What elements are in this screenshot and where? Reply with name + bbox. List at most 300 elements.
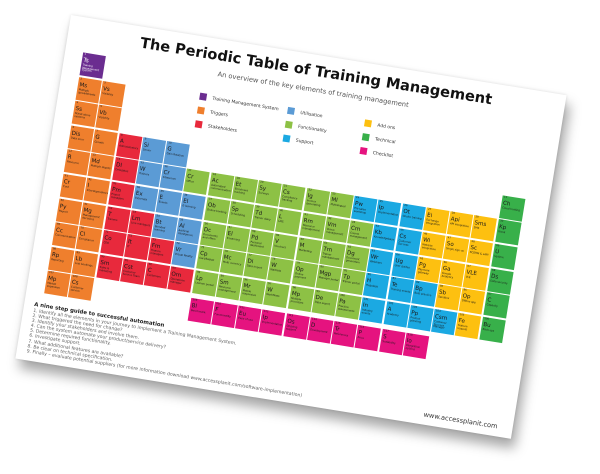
periodic table: 78 [272,257,275,261]
text block: nine step guide: 9. Finally – evaluate potential suppliers (for more information download www.accessplanit.com/software-implementation) [26,349,302,399]
periodic table: 42 [328,217,332,220]
periodic table: E-learning [182,204,196,209]
periodic table: Mp [291,290,301,298]
periodic table: 10 [168,141,172,145]
periodic table: E [159,194,164,201]
periodic table: Dis [71,130,81,137]
periodic table: Bu [483,321,491,329]
periodic table: Trainer portal [342,280,360,286]
periodic table: 79 [297,261,300,265]
text block: nine step guide: A nine step guide to successful automation [34,302,165,329]
periodic table: W [267,286,273,293]
periodic table: 41 [304,213,308,216]
legend: Support [295,139,314,146]
periodic table: 44 [375,224,379,228]
periodic table: El [183,198,189,205]
text block: nine step guide: 3. Identify your stakeholders and involve them. [31,319,139,341]
periodic table: Gain Rotation [166,152,184,158]
periodic table: V [275,238,279,245]
periodic table: Pw [355,200,363,208]
periodic table: Customer Success [398,239,411,247]
periodic table: 88 [53,247,56,251]
periodic table: 2 [80,77,82,81]
periodic table: Events [158,201,168,205]
periodic table: Data error [71,137,84,142]
periodic table: 24 [356,196,359,199]
periodic table: A [387,306,392,312]
periodic table: Multilingual [330,203,346,208]
periodic table: 93 [172,266,176,270]
periodic table: Wr [370,254,379,261]
periodic table: 102 [388,301,394,305]
periodic table: Kp [499,224,507,231]
periodic table: 3 [104,81,106,84]
periodic table: Kb [374,229,382,236]
periodic table: 34 [137,186,140,189]
periodic table: 53 [133,210,136,214]
periodic table: W [271,262,277,269]
periodic table: Product planning [410,316,421,324]
periodic table: Marketing [299,249,312,254]
periodic table: Md [91,158,100,165]
periodic table: User guides [394,264,410,269]
periodic table: 69 [57,222,60,226]
periodic table: Visibility [98,116,109,121]
periodic table: 67 [467,265,471,268]
periodic table: Resource [67,160,79,165]
periodic table: C [147,267,152,274]
periodic table: 95 [220,274,224,278]
periodic table: 30 [500,219,504,223]
periodic table: Website integration [422,243,436,251]
periodic table: 87 [488,292,492,296]
periodic table: Resource management [218,285,236,294]
periodic table: Ongoing support [286,325,298,332]
periodic table: 103 [412,305,417,309]
text block: nine step guide [26,302,302,399]
legend: Add ons [377,123,395,131]
periodic table: Ch [503,200,511,207]
periodic table: Pre-sales workshop [354,207,366,214]
legend [194,92,396,159]
periodic table: Multiple processes [290,297,304,305]
periodic table: Lost bookings [75,262,93,268]
periodic table: Cs [283,189,290,196]
periodic table: Tp [343,273,351,280]
periodic table: 31 [65,174,68,178]
periodic table: Pp [411,310,419,317]
periodic table: 43 [352,221,355,224]
periodic table: F [215,306,219,313]
periodic table: Tm [323,246,333,253]
periodic table: Cs [71,279,79,286]
periodic table: Project managers [111,193,124,200]
periodic table: Cp [200,250,208,257]
periodic table: 60 [300,238,304,241]
periodic table: Webinars [370,260,382,265]
periodic table: Lp [196,275,203,282]
periodic table: Di [247,258,254,265]
periodic table: Csm [434,314,448,321]
periodic table: Sy [259,185,267,192]
periodic table: Blended learning [154,225,165,232]
periodic table: Multi currency [223,261,241,266]
periodic table: Cost [63,185,69,189]
legend: Technical [375,137,396,145]
periodic table: Cr [63,179,70,185]
periodic table: Dc [203,227,212,234]
periodic table: Mobile responsive [242,289,256,297]
periodic table: Classroom [162,176,176,181]
periodic table: Online booking [207,208,227,214]
footer url: www.accessplanit.com [423,411,498,430]
periodic table: Management decisions [82,214,100,221]
periodic table: Compliance [79,237,94,243]
periodic table: G [95,134,100,141]
periodic table: 63 [371,249,375,253]
periodic table: Sm [100,259,110,267]
periodic table: Externals [135,197,147,202]
periodic table: 76 [224,250,228,253]
periodic table: T [108,211,112,218]
periodic table: Industry events [361,308,373,315]
periodic table: Customer service [70,286,84,293]
periodic table: 112 [263,310,269,313]
periodic table: Integration options [405,344,420,351]
periodic table: 109 [192,298,198,302]
periodic table: Surveys [258,191,269,196]
periodic table: Cc [55,227,63,234]
legend: Functionality [298,125,327,134]
periodic table: Price [357,336,364,340]
periodic table: Rp [51,252,60,259]
periodic table: 37 [209,197,212,201]
periodic table: In [362,302,369,309]
periodic table: Trainers [107,218,118,222]
periodic table: Cs [399,233,407,240]
periodic table: 113 [288,314,293,317]
periodic table: Trainer diary [254,216,271,222]
periodic table: Payroll [59,210,68,214]
periodic table: Academy [387,312,399,317]
periodic table: Back ups [482,328,494,333]
periodic table: Benchmark [191,309,206,314]
title: The Periodic Table of Training Management [139,35,493,108]
periodic table: Ob [207,202,216,209]
periodic table: 28 [452,211,455,215]
periodic table: 116 [359,325,364,329]
periodic table: 99 [316,290,320,293]
periodic table: Exchange integration [426,219,440,226]
periodic table: Io [406,337,412,344]
periodic table: Vouchers [274,245,286,249]
periodic table: El [227,230,233,237]
periodic table: Om [171,271,182,278]
periodic table: Venue management [326,228,344,236]
periodic table: 21 [284,184,287,188]
periodic table: Course management [350,232,367,240]
periodic table: Best practice [414,292,432,297]
periodic table: 100 [340,294,345,297]
periodic table: Pd [251,234,259,241]
periodic table: Bp [415,285,423,292]
periodic table: Visibility [102,92,113,97]
periodic table: Data export [314,301,330,306]
periodic table: Uptime [494,255,504,259]
periodic table: 70 [80,226,84,230]
periodic table: G [167,146,172,152]
periodic table: 81 [344,269,348,272]
periodic table: D [311,322,316,329]
periodic table: Vb [99,109,107,116]
periodic table: 33 [113,182,117,185]
periodic table: Market expansion [47,282,60,289]
periodic table: Mc [223,254,232,261]
periodic table: Fe [458,317,465,324]
periodic table: 51 [84,203,88,206]
periodic table: Dg [347,250,355,257]
periodic table: Ms [79,82,88,89]
periodic table: Development [310,328,328,334]
legend: Triggers [210,111,228,118]
periodic table: 22 [308,188,312,192]
periodic table: Ease of use [238,317,253,322]
periodic table: 80 [320,265,324,269]
periodic table: Data import [246,264,262,270]
periodic table: 90 [101,255,105,258]
periodic table: 32 [88,178,92,181]
periodic table: Automated communication [210,184,231,192]
periodic table: Mp [48,275,57,283]
periodic table: Training Management System [82,64,99,73]
periodic table: De [315,294,324,301]
periodic table: P [358,330,362,336]
periodic table: Si [143,142,149,149]
periodic table: Bt [155,219,162,226]
periodic table: Wi [423,237,430,244]
periodic table: Kiosk [498,230,505,234]
periodic table: 97 [268,282,271,285]
periodic table: Dl [116,162,122,169]
periodic table: Resource management [302,224,320,232]
periodic table: Ss [75,105,82,112]
periodic table: Document generation [346,256,360,264]
periodic table: 62 [348,245,351,249]
periodic table: References [334,332,348,338]
periodic table: 47 [448,236,451,240]
periodic table: Offline app [462,299,476,305]
periodic table: 77 [248,253,252,257]
periodic table: Ac [211,177,219,184]
periodic table: 98 [293,286,296,289]
periodic table: 59 [276,234,279,237]
periodic table: 20 [260,180,264,184]
periodic table: 117 [384,329,389,333]
periodic table: 49 [496,244,500,247]
periodic table: 83 [392,277,396,280]
periodic table: 14 [117,157,121,161]
periodic table: 92 [148,263,152,266]
periodic table: Reporting [51,258,64,263]
periodic table: Learner portal [195,281,214,287]
periodic table: Payment gateway [418,268,430,275]
periodic table: Onsite training [402,215,422,221]
periodic table: Delegates [115,168,129,173]
periodic table: Personal dashboard [250,241,264,248]
periodic table: 4 [76,101,78,104]
periodic table: Cst [124,263,133,271]
periodic table: 52 [109,207,113,210]
periodic table: 12 [69,149,72,153]
periodic table: 6 [72,126,74,129]
periodic table: Online payment [294,272,306,280]
periodic table: 46 [424,232,427,236]
periodic table: Ip [378,204,384,211]
periodic table: 27 [428,208,431,211]
periodic table: 104 [436,309,441,313]
periodic table: Feature request [457,324,468,331]
periodic table: H [366,277,372,284]
periodic table: Trainers [139,172,149,177]
periodic table: IT [127,245,130,248]
periodic table: Ei [427,212,433,219]
periodic table: 8 [121,134,123,137]
periodic table: VLE [465,276,471,279]
periodic table: Ml [331,197,338,203]
text block: nine step guide: 7. What additional features are available? [28,339,124,359]
periodic table: Enrolment tracking [234,188,248,195]
periodic table: 39 [256,205,260,209]
periodic table: 26 [404,204,408,207]
periodic table: Single sign-on [446,247,464,253]
text block: nine step guide: 2. What triggered the need for change? [32,314,123,333]
periodic table: Eu [239,310,246,317]
periodic table [44,52,526,360]
periodic table: Implementation [262,321,282,327]
periodic table: Compliance tracking [282,195,297,202]
periodic table: Op [295,266,304,273]
periodic table: Tr [334,326,340,332]
periodic table: 73 [152,238,156,241]
periodic table: Co [104,235,112,242]
periodic table: 105 [459,313,465,317]
periodic table: Bl [191,303,197,309]
periodic table: 74 [176,242,180,245]
periodic table: Cloud hosting [502,207,520,212]
periodic table: Ip [262,314,268,321]
periodic table: Helpdesk [366,284,378,289]
periodic table: M [299,242,305,249]
periodic table: Ga [442,265,451,272]
periodic table: Cl [79,231,86,238]
periodic table: Sc [470,244,478,251]
periodic table: LMS [278,220,284,224]
periodic table: Pg [419,261,426,268]
periodic table: 40 [280,209,283,212]
periodic table: Scalability [382,340,396,345]
periodic table: 108 [73,275,78,278]
periodic table: API integration [450,222,469,228]
periodic table: 106 [484,317,489,321]
periodic table: R [67,154,72,160]
periodic table: 11 [504,196,507,199]
periodic table: 57 [228,226,232,229]
periodic table: 107 [49,271,54,275]
periodic table: Os [287,318,295,325]
periodic table: Manager portal [318,276,339,282]
periodic table: 86 [463,288,467,292]
periodic table: 101 [364,297,369,301]
periodic table: 89 [76,251,80,254]
periodic table: Google Analytics [441,272,453,279]
periodic table: I [87,182,90,189]
periodic table: 45 [400,228,404,232]
periodic table: 66 [444,261,447,264]
text block: nine step guide: 8. Be clear on technical specification. [27,344,113,363]
legend: Training Management System [212,97,279,112]
periodic table: 35 [160,190,164,193]
periodic table: Customers [147,274,161,279]
periodic table: 114 [312,317,317,321]
periodic table: Cr [187,173,194,180]
periodic table: 48 [471,240,475,243]
periodic table: Pm [112,186,121,194]
periodic table: Growth [94,141,104,145]
periodic table: Practice assessments [338,305,355,313]
periodic table: 82 [368,273,371,276]
periodic table: 9 [144,137,146,141]
periodic table: Sales & marketing [99,266,112,274]
periodic table: Sp [231,206,239,213]
periodic table: Customer Service Team [123,270,140,278]
periodic table: Communication [55,233,76,240]
periodic table: Ex [135,190,143,197]
periodic table: Line managers [131,221,150,227]
periodic table: 71 [105,230,109,234]
periodic table: Waitlists [270,268,281,273]
periodic table: Functionality [214,313,231,319]
periodic table: Cm [351,225,361,232]
periodic table: 56 [205,222,208,226]
legend: Utilisation [300,111,323,119]
periodic table: So [446,241,454,248]
periodic table: 25 [379,200,383,203]
periodic table: Sms [474,220,487,228]
periodic table: 19 [236,177,240,180]
periodic table: Training events [391,288,411,294]
periodic table: 13 [92,153,96,157]
periodic table: 23 [332,192,336,196]
periodic table: Op [462,293,471,300]
periodic table: 55 [180,218,184,222]
periodic table: 29 [475,215,479,219]
periodic table: Fm [151,242,161,250]
periodic table: 50 [61,199,64,202]
periodic table: Multiple spreadsheets [78,88,96,97]
periodic table: Vr [175,246,182,253]
periodic table: 18 [213,173,216,176]
periodic table: Al [179,223,185,229]
periodic table: Api [450,216,460,223]
periodic table: SMS [473,226,479,230]
periodic table: Ig [307,193,313,199]
periodic table: VLE [466,269,477,277]
periodic table: 54 [156,214,160,218]
periodic table: 16 [164,165,168,168]
periodic table: 68 [492,269,496,272]
periodic table: Py [59,203,67,210]
periodic table: Virtual Reality [174,253,193,259]
